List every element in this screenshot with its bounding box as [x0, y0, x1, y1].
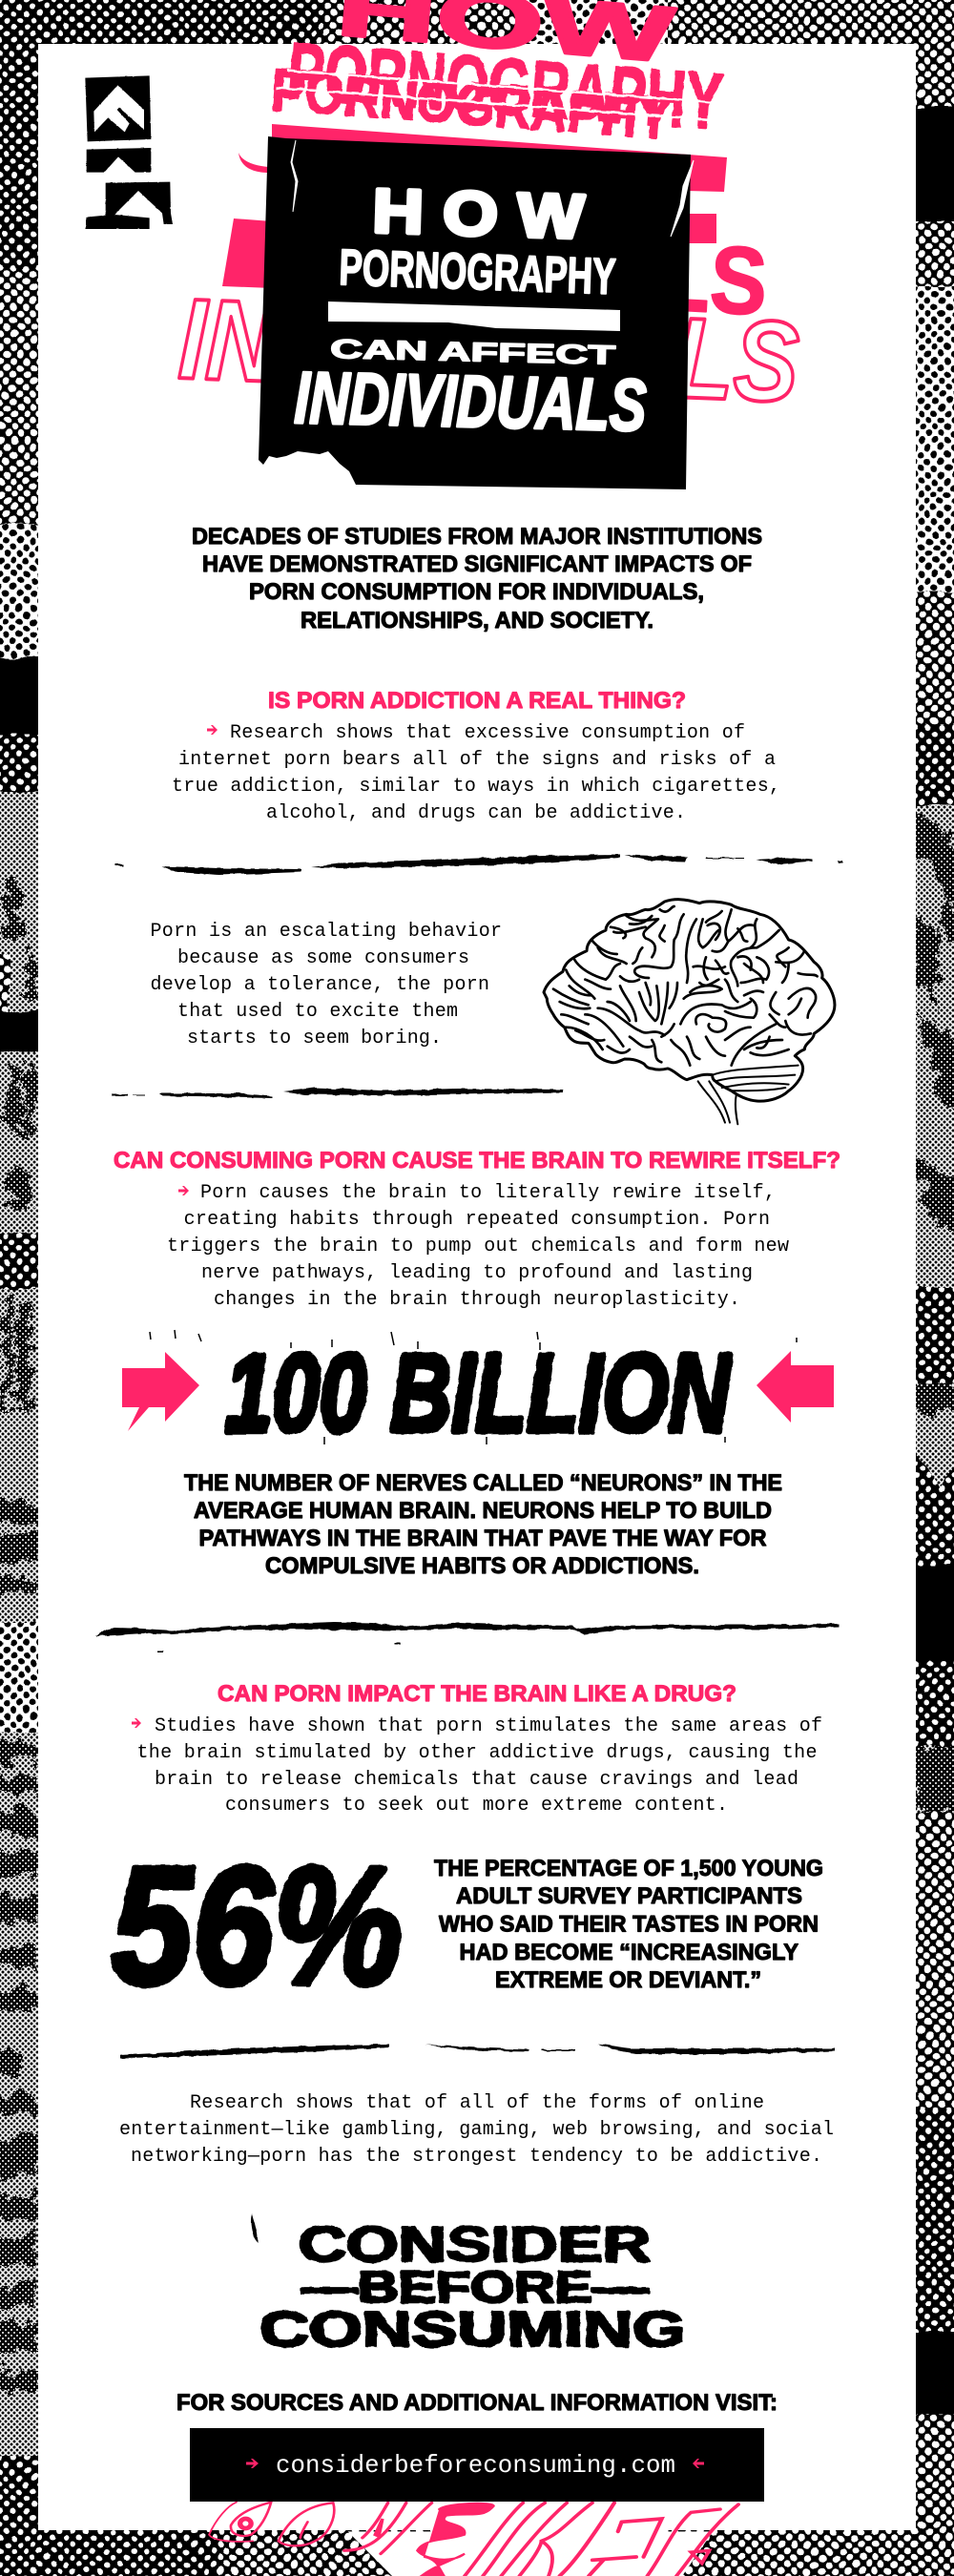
arrow: right pink	[757, 1351, 834, 1423]
title: HOW: HOW	[372, 176, 605, 252]
right border strip	[914, 0, 954, 2576]
paragraph: changes in the brain through neuroplasticity.	[214, 1289, 740, 1311]
paragraph: creating habits through repeated consumption. Porn	[184, 1209, 770, 1231]
paragraph: internet porn bears all of the signs and risks of a	[178, 749, 776, 771]
paragraph	[137, 1715, 822, 1817]
paragraph: Studies have shown that porn stimulates the same areas of	[155, 1715, 822, 1737]
paragraph: that used to excite them	[177, 1001, 458, 1023]
icon: arrow left	[693, 2459, 704, 2468]
neurons statement: COMPULSIVE HABITS OR ADDICTIONS.	[265, 1553, 699, 1579]
section: escalating behavior	[151, 900, 835, 1124]
big number: 56%	[112, 1833, 403, 2020]
bottom border strip	[29, 2526, 925, 2576]
divider	[113, 1088, 563, 1098]
closing paragraph	[119, 2092, 834, 2168]
title: PORNOGRAPHY: PORNOGRAPHY	[339, 239, 616, 305]
fine halftone base	[0, 792, 954, 2457]
paragraph: develop a tolerance, the porn	[151, 974, 489, 996]
description	[434, 1856, 823, 1993]
paragraph: the brain stimulated by other addictive drugs, causing the	[137, 1742, 817, 1764]
intro statement	[192, 524, 762, 634]
stat: 100 billion	[122, 1330, 834, 1455]
neurons statement: PATHWAYS IN THE BRAIN THAT PAVE THE WAY FOR	[198, 1526, 767, 1551]
logo: consider before consuming	[251, 2213, 686, 2358]
logo: consider before consuming: CONSUMING	[259, 2302, 686, 2358]
neurons statement: THE NUMBER OF NERVES CALLED “NEURONS” IN THE	[184, 1470, 782, 1496]
description: THE PERCENTAGE OF 1,500 YOUNG	[434, 1856, 823, 1881]
logo mark: middle band	[87, 148, 151, 173]
icon: arrow	[132, 1718, 141, 1728]
section: is porn addiction real	[172, 688, 780, 824]
pink torn title layers	[176, 0, 801, 426]
divider	[95, 1622, 839, 1652]
closing paragraph: entertainment—like gambling, gaming, web browsing, and social	[119, 2119, 834, 2141]
description: WHO SAID THEIR TASTES IN PORN	[439, 1912, 819, 1937]
logo	[85, 75, 173, 229]
paragraph: Porn is an escalating behavior	[151, 921, 502, 943]
divider	[115, 855, 842, 875]
top border strip	[29, 0, 925, 48]
pink bar behind title card	[272, 124, 727, 192]
pink word: INDIVIDUALS outline: INDIVIDUALS	[176, 275, 801, 426]
paragraph	[167, 1182, 789, 1311]
url text: considerbeforeconsuming.com	[276, 2452, 675, 2480]
paragraph: because as some consumers	[177, 947, 469, 969]
paragraph: Research shows that excessive consumption of	[230, 722, 745, 744]
pink fragment right	[682, 214, 716, 243]
title: CAN AFFECT: CAN AFFECT	[330, 334, 615, 370]
paragraph: alcohol, and drugs can be addictive.	[266, 802, 686, 824]
section: rewire	[114, 1148, 840, 1311]
section: like a drug	[132, 1681, 822, 1817]
paragraph: consumers to seek out more extreme content.	[225, 1795, 728, 1817]
neurons statement	[184, 1470, 782, 1579]
pink word: PORNOGRAPHY: PORNOGRAPHY	[269, 57, 674, 153]
heading: IS PORN ADDICTION A REAL THING?	[268, 688, 686, 714]
paragraph: true addiction, similar to ways in which cigarettes,	[172, 776, 780, 798]
paragraph: brain to release chemicals that cause cravings and lead	[155, 1769, 798, 1791]
paragraph	[172, 722, 780, 824]
arrow: left pink	[122, 1352, 199, 1431]
pink word: INDIVIDUALS filled: INDIVIDUALS	[221, 200, 770, 336]
intro statement: DECADES OF STUDIES FROM MAJOR INSTITUTIONS	[192, 524, 762, 550]
divider	[120, 2044, 835, 2058]
description: HAD BECOME “INCREASINGLY	[460, 1940, 798, 1965]
icon: arrow	[207, 725, 218, 735]
big number: 100 BILLION	[225, 1331, 732, 1455]
pink word: PORNOGRAPHY: PORNOGRAPHY	[285, 26, 725, 147]
pink block: letter I	[222, 218, 272, 288]
title: INDIVIDUALS: INDIVIDUALS	[294, 357, 647, 447]
paragraph	[151, 921, 502, 1049]
logo: consider before consuming: —BEFORE—	[301, 2262, 649, 2312]
icon: arrow right	[246, 2459, 259, 2468]
heading: CAN CONSUMING PORN CAUSE THE BRAIN TO REWIRE ITSELF?	[114, 1148, 840, 1174]
stat: 56 percent	[112, 1833, 823, 2020]
logo: consider before consuming: CONSIDER	[298, 2217, 651, 2273]
closing paragraph: networking—porn has the strongest tendency to be addictive.	[131, 2146, 822, 2168]
left border strip	[0, 0, 40, 2576]
closing paragraph: Research shows that of all of the forms of online	[190, 2092, 764, 2114]
intro statement: RELATIONSHIPS, AND SOCIETY.	[301, 608, 653, 634]
icon: brain	[544, 900, 835, 1124]
paragraph: starts to seem boring.	[187, 1028, 442, 1049]
neurons statement: AVERAGE HUMAN BRAIN. NEURONS HELP TO BUILD	[194, 1498, 772, 1524]
description: ADULT SURVEY PARTICIPANTS	[456, 1883, 802, 1909]
paragraph: Porn causes the brain to literally rewire itself,	[200, 1182, 776, 1204]
black torn paper	[259, 136, 691, 489]
url box	[190, 2428, 764, 2502]
sources heading: FOR SOURCES AND ADDITIONAL INFORMATION VISIT:	[176, 2390, 778, 2416]
icon: arrow	[178, 1186, 189, 1195]
title card	[259, 136, 694, 489]
paper tears	[291, 140, 694, 237]
dark halftone blotches	[0, 792, 954, 2457]
paragraph: nerve pathways, leading to profound and lasting	[201, 1262, 753, 1284]
heading: CAN PORN IMPACT THE BRAIN LIKE A DRUG?	[218, 1681, 736, 1707]
ink speckle	[150, 1330, 797, 1444]
intro statement: PORN CONSUMPTION FOR INDIVIDUALS,	[249, 579, 704, 605]
pink fragment left	[238, 153, 269, 173]
logo mark: top square	[85, 75, 151, 141]
logo mark: bottom shape	[86, 182, 173, 229]
description: EXTREME OR DEVIANT.”	[495, 1967, 761, 1993]
white rule	[328, 301, 620, 331]
intro statement: HAVE DEMONSTRATED SIGNIFICANT IMPACTS OF	[202, 551, 752, 577]
paragraph: triggers the brain to pump out chemicals and form new	[167, 1236, 789, 1257]
bottom pink scribble	[209, 2503, 738, 2576]
